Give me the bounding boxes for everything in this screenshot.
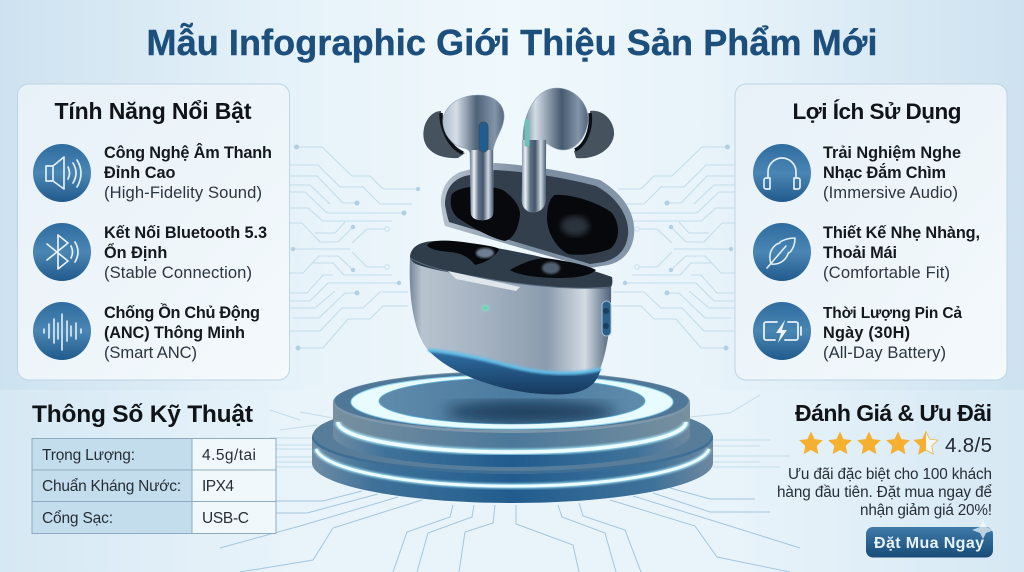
- icon: sound wave: [33, 302, 91, 360]
- text: noise cancelling: (Smart ANC): [104, 343, 197, 362]
- upper disc: [333, 371, 690, 467]
- specs table: Trọng Lượng:: [42, 447, 135, 464]
- case lid: [441, 163, 634, 268]
- case rim: [410, 241, 612, 289]
- circuit lines floor: [220, 395, 800, 572]
- text: immersive audio: (Immersive Audio): [823, 183, 958, 202]
- case shadow on podium: [445, 401, 615, 423]
- text: comfortable fit: Thiết Kế Nhẹ Nhàng,: [823, 224, 980, 242]
- text: noise cancelling: (ANC) Thông Minh: [104, 324, 245, 342]
- specs table: 4.5g/tai: [202, 447, 256, 464]
- case cavity right: [510, 258, 596, 278]
- text: battery: Thời Lượng Pin Cả: [823, 305, 962, 322]
- heading: technical specs: Thông Số Kỹ Thuật: [32, 401, 253, 428]
- offer text: nhận giảm giá 20%!: [860, 502, 992, 519]
- side button: [602, 301, 611, 336]
- panel: benefits: [735, 84, 1007, 380]
- icon: headphones: [753, 144, 811, 202]
- feature: noise cancelling: [33, 302, 260, 362]
- icon: bluetooth: [33, 223, 91, 281]
- specs table: Chuẩn Kháng Nước:: [42, 478, 181, 495]
- feature: bluetooth: [33, 223, 267, 282]
- button: order now: Đặt Mua Ngay: [874, 535, 984, 552]
- feature: sound: [33, 143, 272, 202]
- specs table: Cổng Sạc:: [42, 510, 113, 527]
- text: noise cancelling: Chống Ồn Chủ Động: [104, 303, 260, 322]
- button: order now: [866, 519, 994, 558]
- text: bluetooth: Ổn Định: [104, 243, 167, 262]
- star rating: [799, 432, 992, 457]
- text: bluetooth: (Stable Connection): [104, 263, 252, 282]
- heading: features: Tính Năng Nổi Bật: [54, 98, 252, 124]
- earbud left: [423, 95, 504, 220]
- heading: reviews: Đánh Giá & Ưu Đãi: [795, 400, 992, 426]
- circuit lines right: [613, 144, 735, 350]
- offer text: Ưu đãi đặc biệt cho 100 khách: [788, 466, 992, 483]
- text: battery: (All-Day Battery): [823, 343, 946, 362]
- benefit: battery: [753, 302, 962, 362]
- specs table: USB-C: [202, 510, 249, 527]
- heading: benefits: Lợi Ích Sử Dụng: [792, 99, 962, 124]
- text: comfortable fit: (Comfortable Fit): [823, 263, 950, 282]
- earbud right: [522, 88, 614, 212]
- text: immersive audio: Trải Nghiệm Nghe: [823, 144, 961, 162]
- text: sound: Đỉnh Cao: [104, 164, 176, 182]
- text: comfortable fit: Thoải Mái: [823, 244, 897, 262]
- icon: feather: [753, 223, 811, 281]
- section: reviews and offer: [777, 400, 994, 558]
- icon: battery: [753, 302, 811, 360]
- text: battery: Ngày (30H): [823, 324, 910, 342]
- benefit: comfortable fit: [753, 223, 980, 282]
- panel: features: [18, 84, 290, 380]
- section: technical specs: [32, 401, 276, 534]
- case body: [410, 241, 612, 395]
- offer text: hàng đầu tiên. Đặt mua ngay để: [777, 484, 992, 501]
- lid cavity left: [451, 186, 520, 241]
- product: earbuds and case: [410, 88, 634, 395]
- circuit lines left: [290, 144, 420, 350]
- rating value: 4.8/5: [945, 434, 992, 457]
- text: sound: Công Nghệ Âm Thanh: [104, 143, 272, 162]
- lower disc: [312, 399, 713, 503]
- benefit: immersive audio: [753, 144, 961, 202]
- indicator led: [482, 304, 490, 312]
- title: Mẫu Infographic Giới Thiệu Sản Phẩm Mới: [146, 22, 878, 63]
- text: immersive audio: Nhạc Đắm Chìm: [823, 163, 946, 182]
- blue glowing base: [428, 350, 601, 395]
- podium: [312, 371, 713, 503]
- case cavity left: [427, 241, 499, 265]
- specs table: [32, 438, 276, 534]
- text: bluetooth: Kết Nối Bluetooth 5.3: [104, 224, 267, 242]
- lid cavity right: [547, 195, 618, 255]
- icon: speaker: [33, 144, 91, 202]
- specs table: IPX4: [202, 478, 234, 495]
- text: sound: (High-Fidelity Sound): [104, 183, 262, 202]
- hinge strip: [448, 271, 520, 291]
